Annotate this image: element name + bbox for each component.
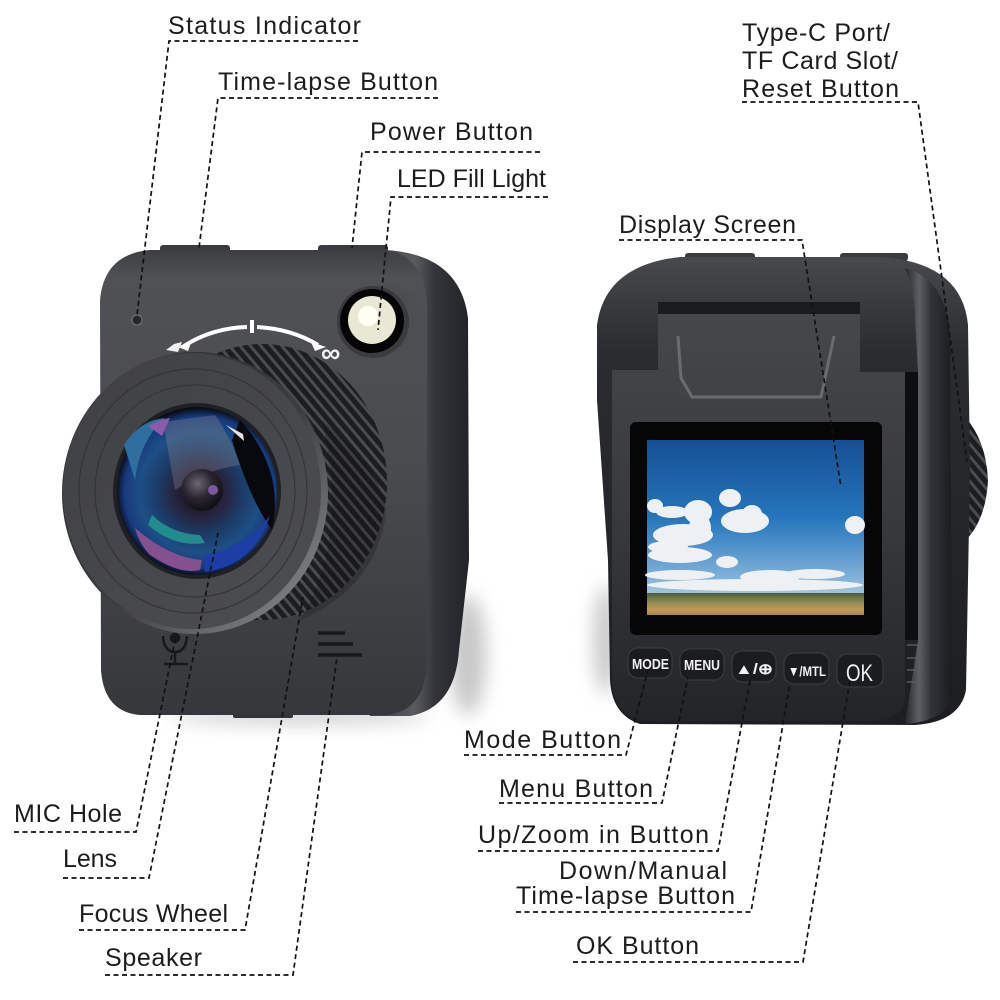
rear side sheen (905, 268, 952, 724)
rear camera (597, 253, 988, 725)
camera side edge (370, 250, 469, 716)
flip panel (612, 302, 918, 721)
label: Down/Manual Time-lapse Button: Time-lapse Button (516, 882, 735, 910)
label: Display Screen (619, 211, 841, 487)
label: Time-lapse Button (199, 68, 438, 248)
control buttons: MENU (684, 657, 720, 674)
display image (645, 440, 865, 615)
side grip ridges (907, 645, 923, 682)
control buttons: OK (846, 660, 873, 687)
label: Display Screen: Display Screen (619, 211, 796, 239)
LED fill light (337, 284, 426, 358)
display frame (630, 422, 882, 635)
lens glass (117, 407, 277, 575)
label: Speaker (105, 657, 337, 975)
label: Mode Button: Mode Button (464, 726, 621, 754)
lens barrel (62, 352, 328, 634)
label: Power Button: Power Button (370, 118, 533, 146)
label: Focus Wheel: Focus Wheel (79, 900, 228, 928)
label: Status Indicator: Status Indicator (168, 12, 361, 40)
label: Type-C Port: Reset Button (742, 75, 899, 103)
label: Mode Button (464, 670, 648, 755)
label: Type-C Port (742, 19, 967, 462)
camera body (100, 250, 427, 715)
control buttons: MODE (632, 656, 669, 673)
label: OK Button (573, 680, 850, 962)
label: LED Fill Light (378, 165, 548, 330)
top buttons (685, 253, 908, 261)
label: Down/Manual Time-lapse Button: Down/Manual (559, 857, 727, 885)
front camera (62, 245, 469, 718)
label: Time-lapse Button: Time-lapse Button (218, 68, 438, 96)
label: Speaker: Speaker (105, 944, 202, 972)
focus wheel (137, 344, 387, 620)
bottom tab (233, 712, 293, 718)
speaker grille (318, 633, 362, 655)
rear silhouette (597, 257, 970, 725)
label: Focus Wheel (79, 597, 303, 930)
label: MIC Hole (14, 640, 175, 832)
control buttons (628, 648, 883, 687)
top buttons (160, 245, 388, 254)
label: Menu Button (499, 677, 688, 803)
label: Down/Manual Time-lapse Button (516, 683, 790, 912)
control buttons: ▲/⊕ (735, 661, 773, 678)
label: Type-C Port: TF Card Slot/ (742, 47, 898, 75)
focus scale (166, 320, 340, 368)
label: Power Button (352, 118, 540, 248)
label: OK Button: OK Button (576, 932, 699, 960)
label: Menu Button: Menu Button (499, 775, 653, 803)
label: Lens (63, 533, 218, 878)
status indicator dot (132, 315, 142, 325)
MIC icon (163, 634, 188, 664)
label: MIC Hole: MIC Hole (14, 800, 122, 828)
soft shadows (170, 585, 618, 723)
focus scale: ∞ (321, 338, 340, 368)
label: Type-C Port: Type-C Port/ (742, 19, 890, 47)
label: Up/Zoom in Button: Up/Zoom in Button (478, 821, 709, 849)
control buttons: ▼/MTL (788, 663, 826, 679)
label: LED Fill Light: LED Fill Light (397, 165, 546, 193)
label: Up/Zoom in Button (478, 680, 750, 851)
focus wheel edge (965, 417, 988, 541)
label: Lens: Lens (63, 845, 117, 873)
label: Status Indicator (137, 12, 361, 315)
